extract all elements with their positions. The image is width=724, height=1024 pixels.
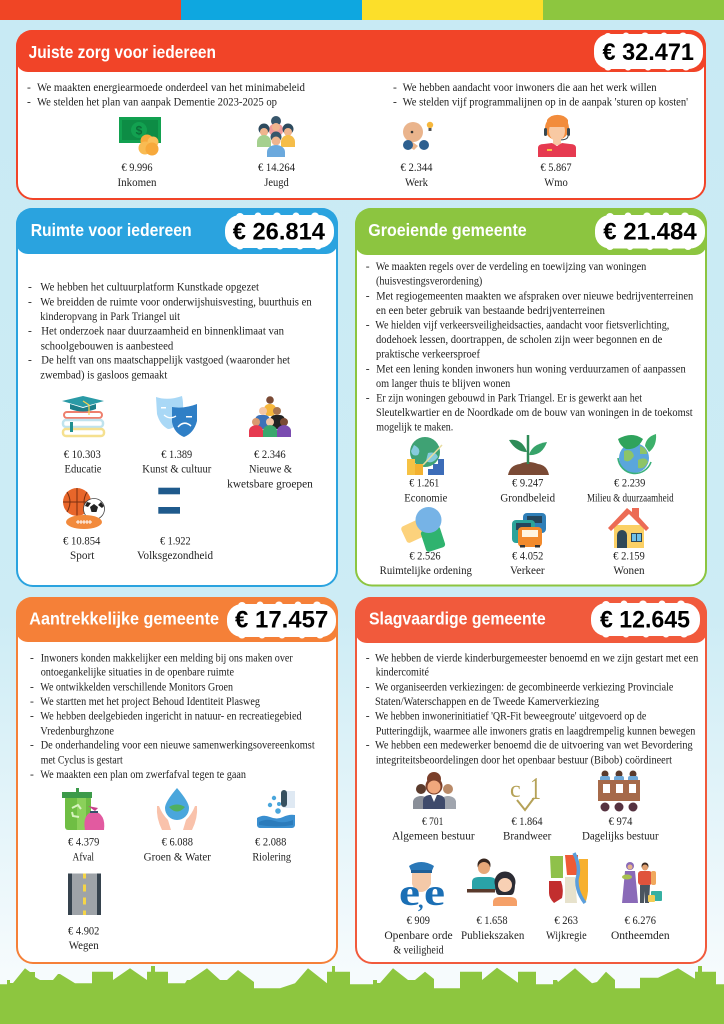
icon: displaced people with luggage [622,862,662,903]
text block: bullets: - [30,652,34,664]
amount badge [594,32,703,70]
item: Ruimtelijke ordening: € 2.526 [409,550,441,562]
item: Volksgezondheid: Volksgezondheid [137,550,213,562]
item: Openbare orde & veiligheid: Openbare orde [384,930,453,942]
green skyline [0,966,724,1024]
text block: bullets [30,652,315,781]
icon: cars in traffic [512,513,546,548]
item: Sport: € 10.854 [63,535,101,547]
item: Grondbeleid: € 9.247 [512,478,544,490]
item: Algemeen bestuur: € 701 [422,816,444,828]
icon: overlapping shapes [400,507,446,553]
text block: bullets [28,282,312,381]
text block: bullets: - [28,326,32,338]
item: Werk [400,122,433,189]
text block: bullets: We maakten regels over de verdeling en toewijzing van woningen [376,261,647,273]
item: Kunst & cultuur: Kunst & cultuur [142,464,211,476]
text block: bullets: We maakten een plan om zwerfafval tegen te gaan [40,769,246,781]
icon: theatre masks [156,396,197,437]
item: Riolering [252,790,295,863]
text block: left bullets: We stelden het plan van aanpak Dementie 2023-2025 op [37,96,277,108]
item: Kunst & cultuur: € 1.389 [161,449,192,461]
text block: bullets: kinderopvang in Park Triangel uit [40,311,181,323]
text block: bullets: Met een lening konden inwoners hun woning verduurzamen of aanpassen [376,363,686,375]
text block: bullets: schoolgebouwen is aanbesteed [41,340,174,352]
item: Nieuwe & kwetsbare groepen [227,396,313,490]
icon: police officer with e,e: , [418,888,424,913]
item: Kunst & cultuur [142,396,211,476]
icon: police officer with e,e [399,862,445,914]
icon: police officer with e,e: e [424,872,445,914]
text block: bullets: - [30,696,34,708]
text block: bullets: - [366,392,370,404]
text block: bullets: en een beter gebruik van bestaande bedrijventerreinen [376,305,605,317]
item: Afval: € 4.379 [68,837,100,849]
text block: bullets: - [366,681,370,693]
item: Grondbeleid: Grondbeleid [500,492,555,504]
text block: bullets: kindercomité [376,667,429,679]
item: Wegen: Wegen [69,940,99,952]
text block: right bullets [393,82,688,108]
item: Wmo: € 5.867 [540,162,572,174]
item: Economie: Economie [404,492,447,504]
text block: bullets: We ontwikkelden verschillende Monitors Groen [40,681,233,693]
item: Riolering: € 2.088 [255,837,287,849]
item: Wonen [608,508,649,577]
text block: bullets: - [366,740,370,752]
item: Jeugd: Jeugd [264,177,289,189]
text block: bullets: Het onderzoek naar duurzaamheid en binnenklimaat van [41,326,284,338]
item: Groen & Water: € 6.088 [162,837,193,849]
item: Werk: Werk [405,177,428,189]
item: Openbare orde & veiligheid: € 909 [407,915,430,927]
amount badge: € 12.645 [600,606,690,633]
text block: right bullets: We hebben aandacht voor inwoners die aan het werk willen [403,82,657,94]
text block: bullets: We organiseerden verkiezingen: de gecombineerde verkiezing Provinciale [375,681,673,693]
icon: books with graduation cap [62,396,104,436]
amount badge: € 17.457 [235,606,328,633]
icon: water with drain pipe [257,790,295,828]
icon: hands holding water drop [157,788,197,830]
item: Riolering: Riolering [252,851,291,863]
item: Wijkregie [546,853,588,942]
icon: c 1 checkmark: 1 [530,770,541,806]
text block: bullets: (huisvestingsverordening) [376,276,482,288]
item: Economie: € 1.261 [409,478,440,490]
item: Educatie: Educatie [64,464,102,476]
text block: bullets: Er zijn woningen gebouwd in Park Triangel. Er is gewerkt aan het [376,392,643,404]
text block: bullets: - [30,681,34,693]
item: Wegen: € 4.902 [68,925,100,937]
item: Ruimtelijke ordening: Ruimtelijke ordening [380,565,472,577]
icon: head with lightbulb [403,122,433,150]
icon: two bars [158,488,180,514]
item: Brandweer [503,770,552,843]
item: Publiekszaken: € 1.658 [476,915,508,927]
item: Jeugd: € 14.264 [258,162,295,174]
item: Brandweer: Brandweer [503,831,552,843]
heading: Slagvaardige gemeente [369,608,546,628]
text block: right bullets: - [393,82,397,94]
text block: bullets: mogelijk te maken. [376,422,453,434]
text block: bullets: met Cyclus is gestart [41,754,123,766]
item: Sport [63,488,104,562]
item: Jeugd [257,116,295,189]
icon: c 1 checkmark: c [510,777,521,803]
text block: bullets: We hielden vijf verkeersveiligheidsacties, aandacht voor fietsverlichting, [375,319,669,331]
text block: bullets: - [30,740,34,752]
item: Inkomen: Inkomen [118,177,157,189]
text block: bullets: We hebben de vierde kinderburgemeester benoemd en we zijn gestart met een [375,652,699,664]
item: Algemeen bestuur [392,772,475,843]
text block: bullets: Met regiogemeenten maakten we afspraken over nieuwe bedrijventerreinen [376,290,694,302]
panel: Aantrekkelijke gemeente [16,597,338,963]
item: Milieu & duurzaamheid: Milieu & duurzaamheid [587,492,674,504]
icon: earth with leaves [618,434,656,473]
panel: Ruimte voor iedereen [16,208,338,586]
heading: Aantrekkelijke gemeente [29,608,219,628]
panel: Juiste zorg voor iedereen [16,30,706,199]
text block: bullets: - [366,290,370,302]
item: Ontheemden: Ontheemden [611,930,670,942]
text block: bullets: Vredenburghzone [40,725,114,737]
item: Afval [62,788,104,863]
item: Wonen: Wonen [613,565,645,577]
item: Dagelijks bestuur: € 974 [609,816,633,828]
amount badge: € 32.471 [602,39,694,66]
amount badge [227,602,336,638]
text block: bullets: om langer thuis te blijven wonen [376,378,511,390]
item: Dagelijks bestuur: Dagelijks bestuur [582,831,659,843]
item: Afval: Afval [73,851,94,863]
text block: right bullets: - [393,96,397,108]
item: Werk: € 2.344 [400,162,433,174]
icon: pyramid of people [249,396,291,437]
item: Publiekszaken [461,858,525,942]
item: Milieu & duurzaamheid: € 2.239 [614,478,646,490]
text block: bullets: Sleutelkwartier en de Noordkade om de bouw van woningen in de toekomst [376,407,693,419]
text block: bullets: We hebben inwonerinitiatief 'QR-Fit beweegroute' uitgevoerd op de [375,711,646,723]
item: Educatie: € 10.303 [64,449,101,461]
text block: bullets: integriteitsbeoordelingen door het openbaar bestuur (Bibob) coördineert [376,754,673,766]
text block: bullets: ontoegankelijke situaties in de openbare ruimte [41,667,234,679]
item: Verkeer: € 4.052 [512,550,544,562]
icon: globe with growth [407,437,444,475]
item: Volksgezondheid [137,488,213,562]
item: Milieu & duurzaamheid [587,434,674,504]
item: Verkeer [510,513,546,577]
icon: recycling bin and bag [62,788,104,830]
panel: Slagvaardige gemeente [355,597,707,963]
amount badge [591,600,700,638]
text block: bullets: - [28,282,32,294]
item: Openbare orde & veiligheid: & veiligheid [393,945,444,957]
text block: bullets: - [366,261,370,273]
item: Nieuwe & kwetsbare groepen: kwetsbare groepen [227,478,313,490]
panel: Groeiende gemeente [355,208,707,586]
icon: meeting table [598,770,640,812]
text block: bullets: - [366,319,370,331]
item: Nieuwe & kwetsbare groepen: Nieuwe & [249,464,292,476]
item: Groen & Water [144,788,211,863]
item: Brandweer: € 1.864 [512,816,543,828]
item: Grondbeleid [500,435,555,504]
icon: police officer with e,e: e [399,872,420,914]
item: Nieuwe & kwetsbare groepen: € 2.346 [254,449,286,461]
text block: bullets [366,652,699,766]
item: Wmo: Wmo [544,177,568,189]
amount badge [225,212,334,250]
text block: bullets: We startten met het project Behoud Identiteit Plasweg [40,696,260,708]
item: Ontheemden: € 6.276 [625,915,656,927]
item: Wijkregie: € 263 [554,915,578,927]
item: Dagelijks bestuur [582,770,659,843]
text block: left bullets: - [27,82,31,94]
text block: left bullets: - [27,96,31,108]
text block: bullets: - [28,355,32,367]
item: Groen & Water: Groen & Water [144,851,211,863]
icon: call centre agent [538,115,576,157]
text block: bullets: zwembad) is gasloos gemaakt [40,369,168,381]
icon: money: $ [136,124,143,138]
text block: bullets: - [366,652,370,664]
text block: bullets: De onderhandeling voor een nieuwe samenwerkingsovereenkomst [41,740,315,752]
text block: bullets: - [30,769,34,781]
item: Wmo [538,115,576,189]
text block: bullets: - [28,296,32,308]
top colour band [0,0,724,20]
item: Inkomen [118,117,161,189]
text block: bullets: We hebben het cultuurplatform Kunstkade opgezet [40,282,260,294]
text block: bullets: Inwoners konden makkelijker een melding bij ons maken over [41,652,293,664]
text block: bullets: praktische verkeersproef [376,348,480,360]
item: Inkomen: € 9.996 [122,162,153,174]
item: Wonen: € 2.159 [613,550,645,562]
text block: bullets: We breidden de ruimte voor onderwijshuisvesting, buurthuis en [40,296,312,308]
icon: road [68,874,101,915]
item: Wegen [68,874,101,952]
text block: bullets: We hebben een medewerker benoemd die de uitvoering van wet Bevordering [375,740,693,752]
item: Verkeer: Verkeer [510,565,545,577]
item: Ruimtelijke ordening [380,507,472,577]
icon: group of children [257,116,295,157]
icon: sports balls [63,488,104,529]
text block: bullets: De helft van ons maatschappelijk vastgoed (waaronder het [41,355,291,367]
amount badge: € 26.814 [233,218,326,245]
heading: Juiste zorg voor iedereen [29,42,216,62]
item: Economie [404,437,447,504]
amount badge [595,212,705,250]
text block: bullets: - [366,363,370,375]
text block: left bullets: We maakten energiearmoede onderdeel van het minimabeleid [37,82,305,94]
item: Sport: Sport [70,550,95,562]
item: Educatie [62,396,104,476]
item: Ontheemden [611,862,670,942]
item: Volksgezondheid: € 1.922 [160,535,191,547]
text block: bullets: - [30,711,34,723]
text block: bullets: - [366,711,370,723]
text block: bullets [366,261,694,434]
icon: house [608,508,649,548]
heading: Ruimte voor iedereen [31,220,192,240]
icon: c 1 checkmark [510,770,541,810]
icon: sprout in soil [508,435,549,475]
item: Openbare orde & veiligheid [384,862,453,957]
text block: bullets: Staten/Waterschappen en de Tweede Kamerverkiezing [375,696,599,708]
text block: right bullets: We stelden vijf programmalijnen op in de aanpak 'sturen op kosten' [403,96,688,108]
item: Publiekszaken: Publiekszaken [461,930,525,942]
text block: left bullets [27,82,305,108]
icon: desk clerk and citizen [467,858,517,906]
amount badge: € 21.484 [603,218,697,245]
text block: bullets: We hebben deelgebieden ingericht in natuur- en recreatiegebied [40,711,302,723]
text block: bullets: dodehoek lessen, doortrappen, de scholen zijn weer begonnen en de [376,334,662,346]
icon: three board members [413,772,456,809]
icon: district map [549,853,588,903]
item: Algemeen bestuur: Algemeen bestuur [392,831,475,843]
item: Wijkregie: Wijkregie [546,930,587,942]
heading: Groeiende gemeente [368,220,527,240]
